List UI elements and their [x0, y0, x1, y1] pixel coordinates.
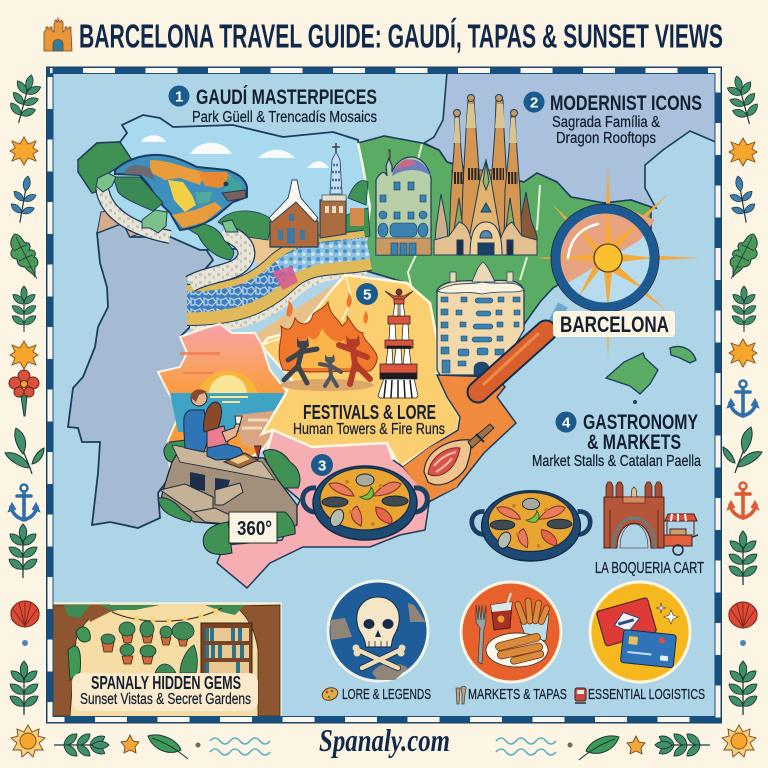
illustration: arc de triomf: [604, 482, 664, 548]
building: casa batllo: [376, 150, 431, 255]
subheading: sagrada familia: Sagrada Família &: [552, 114, 661, 131]
icon: castle: [44, 17, 72, 51]
icon: palette: [320, 686, 340, 702]
subheading: human towers: Human Towers & Fire Runs: [293, 421, 445, 438]
left column icons: [4, 71, 46, 715]
caption: sunset vistas: Sunset Vistas & Secret Gardens: [80, 691, 251, 708]
heading: modernist icons: MODERNIST ICONS: [550, 92, 702, 115]
badge 4: [556, 412, 576, 432]
bottom left ornaments: [11, 725, 270, 759]
circle: essential logistics: [590, 582, 690, 682]
right devil: [339, 345, 370, 384]
picnic board: [224, 453, 258, 468]
region: france sea area: [424, 72, 718, 208]
mosaic colored patch: [272, 266, 298, 290]
building: park guell gatehouse: [269, 180, 318, 247]
illustration: paella left: [303, 466, 427, 540]
icon: fork and spoon: [456, 686, 466, 704]
label: essential logistics: ESSENTIAL LOGISTICS: [588, 686, 705, 703]
bushes behind rock: [263, 450, 300, 488]
region: green park shrubs: [218, 181, 370, 242]
badge 1: 1: [175, 88, 183, 106]
illustration: jamon ham: [424, 424, 494, 485]
right column icons: [722, 72, 764, 715]
heading: and markets: & MARKETS: [587, 431, 681, 454]
region: valencia orange: [403, 375, 516, 503]
middle devil: [320, 364, 341, 386]
region: green hills west: [78, 142, 132, 193]
trees and canopy: [53, 605, 280, 716]
dot: [633, 400, 637, 404]
tan land below the bench: [255, 274, 360, 345]
city view: [236, 410, 280, 448]
label: la boqueria cart: LA BOQUERIA CART: [595, 560, 704, 577]
clouds: [141, 135, 329, 168]
icon: barcelona sun rays: [536, 165, 700, 358]
region: festivals yellow: [262, 275, 460, 467]
string lights: [112, 608, 222, 622]
website name: Spanaly.com: [319, 722, 450, 758]
badge 5: [356, 283, 378, 305]
man: [184, 410, 208, 452]
badge 3: 3: [318, 458, 326, 474]
illustration: human tower: [378, 289, 418, 398]
building: casa mila la pedrera: [437, 262, 524, 375]
illustration: market cart: [664, 514, 698, 555]
region: tan mosaic under lizard: [97, 208, 145, 237]
caption plate: [72, 673, 258, 711]
magnifying glass: [478, 204, 659, 392]
subheading: park guell: Park Güell & Trencadís Mosaics: [192, 109, 377, 126]
badge 4: 4: [562, 414, 571, 432]
caption: spanaly hidden gems: SPANALY HIDDEN GEMS: [91, 673, 241, 693]
panel: map: [50, 70, 718, 719]
sea: [170, 393, 288, 432]
label: lore and legends: LORE & LEGENDS: [342, 686, 431, 703]
bookshelf: [201, 623, 252, 675]
badge 2: 2: [530, 94, 538, 112]
heading: gaudi masterpieces: GAUDÍ MASTERPIECES: [196, 86, 377, 109]
icon: train: [575, 688, 586, 703]
illustration: paella right: [472, 491, 590, 561]
badge 1: [168, 86, 190, 106]
heading: gastronomy: GASTRONOMY: [583, 411, 698, 434]
region: portugal: [68, 223, 213, 528]
hill between lizard and bench: [185, 224, 234, 260]
label: barcelona: BARCELONA: [560, 312, 669, 337]
region: green catalonia and aragon: [358, 136, 651, 378]
region: orange south coast pieces: [403, 432, 470, 500]
subheading: market stalls: Market Stalls & Catalan Paella: [532, 453, 701, 470]
woman: [207, 426, 228, 452]
bottom right ornaments: [496, 725, 756, 760]
label: markets and tapas: MARKETS & TAPAS: [468, 686, 567, 703]
map frame: [46, 67, 722, 723]
region: north sky scene: [78, 115, 370, 250]
subheading: dragon rooftops: Dragon Rooftops: [556, 130, 656, 147]
bench: serpentine mosaic: [102, 187, 368, 327]
lizard: [96, 155, 247, 233]
badge 3: [311, 454, 333, 476]
badge 5: 5: [363, 286, 371, 304]
building: mosaic tower: [320, 143, 364, 238]
badge 2: [524, 92, 544, 112]
region: andalusia pink: [217, 430, 430, 588]
region lines: [408, 144, 540, 350]
illustration: fire devils: [279, 292, 377, 391]
circle: markets and tapas: [461, 582, 561, 682]
building: sagrada familia: [434, 94, 537, 255]
badge: 360: [229, 512, 277, 543]
heading: festivals and lore: FESTIVALS & LORE: [303, 402, 436, 424]
islands: balearics: [606, 346, 696, 394]
region: sunset hillside: [158, 324, 290, 480]
plants in pots: [101, 621, 197, 673]
left devil: [284, 349, 317, 383]
panel: hidden gems: [52, 603, 281, 717]
region: sandy park ground: [240, 215, 368, 268]
sun: [198, 371, 258, 394]
scene: rock lookout: [158, 390, 300, 555]
circle: lore and legends skull: [328, 581, 428, 681]
badge: 360: 360°: [237, 518, 272, 540]
